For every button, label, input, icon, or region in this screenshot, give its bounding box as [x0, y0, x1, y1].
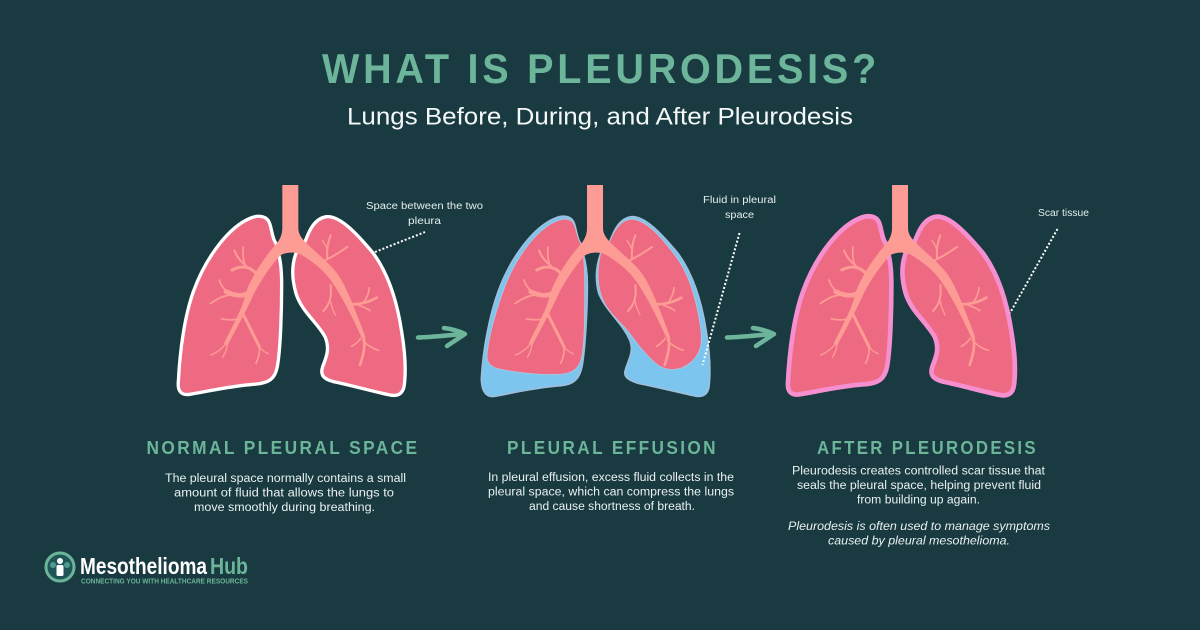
- panel text: normal pleural space: The pleural space normally contains a small: [165, 473, 406, 485]
- lung illustration: after pleurodesis: [788, 185, 1015, 395]
- logo: Mesothelioma Hub: [46, 553, 248, 586]
- callout: space between the two pleura: Space between the two: [366, 201, 483, 212]
- panel text: normal pleural space: amount of fluid that allows the lungs to: [174, 488, 394, 500]
- panel text: after pleurodesis: [788, 438, 1050, 548]
- panel text: pleural effusion: pleural space, which can compress the lungs: [488, 486, 734, 498]
- panel text: pleural effusion: [488, 438, 734, 513]
- icon: people in circle: [46, 553, 74, 581]
- panel text: normal pleural space: move smoothly during breathing.: [194, 502, 375, 514]
- lung illustration: normal pleural space: [178, 185, 405, 395]
- panel text: after pleurodesis: seals the pleural space, helping prevent fluid: [797, 480, 1041, 492]
- panel text: after pleurodesis: Pleurodesis is often used to manage symptoms: [788, 521, 1050, 533]
- callout: scar tissue: Scar tissue: [1038, 208, 1089, 219]
- logo: Mesothelioma Hub: Hub: [210, 553, 248, 579]
- callout: scar tissue: [1010, 208, 1089, 313]
- panel text: normal pleural space: NORMAL PLEURAL SPACE: [146, 438, 420, 458]
- panel text: after pleurodesis: AFTER PLEURODESIS: [817, 438, 1038, 458]
- logo: Mesothelioma Hub: Mesothelioma: [80, 553, 207, 579]
- callout: space between the two pleura: [366, 201, 483, 252]
- lung illustration: pleural effusion: [481, 185, 710, 396]
- callout: fluid in pleural space: [702, 195, 776, 365]
- panel text: normal pleural space: [146, 438, 420, 514]
- arrow: normal to effusion: [418, 328, 465, 346]
- logo: Mesothelioma Hub: CONNECTING YOU WITH HEALTHCARE RESOURCES: [81, 578, 248, 586]
- panel text: pleural effusion: In pleural effusion, excess fluid collects in the: [488, 472, 734, 484]
- fluid around lungs: [481, 216, 710, 396]
- panel text: after pleurodesis: Pleurodesis creates controlled scar tissue that: [792, 466, 1046, 478]
- panel text: after pleurodesis: from building up again.: [857, 494, 980, 506]
- callout: fluid in pleural space: Fluid in pleural: [703, 195, 776, 206]
- panel text: pleural effusion: PLEURAL EFFUSION: [507, 438, 718, 458]
- title: WHAT IS PLEURODESIS?: [322, 45, 880, 92]
- compressed lung tissue: [487, 219, 701, 374]
- panel text: pleural effusion: and cause shortness of breath.: [529, 501, 695, 513]
- callout: space between the two pleura: pleura: [408, 216, 442, 227]
- callout: fluid in pleural space: space: [725, 210, 754, 221]
- panel text: after pleurodesis: caused by pleural mesothelioma.: [828, 536, 1010, 548]
- arrow: effusion to after: [727, 328, 774, 346]
- subtitle: Lungs Before, During, and After Pleurodesis: [347, 104, 853, 130]
